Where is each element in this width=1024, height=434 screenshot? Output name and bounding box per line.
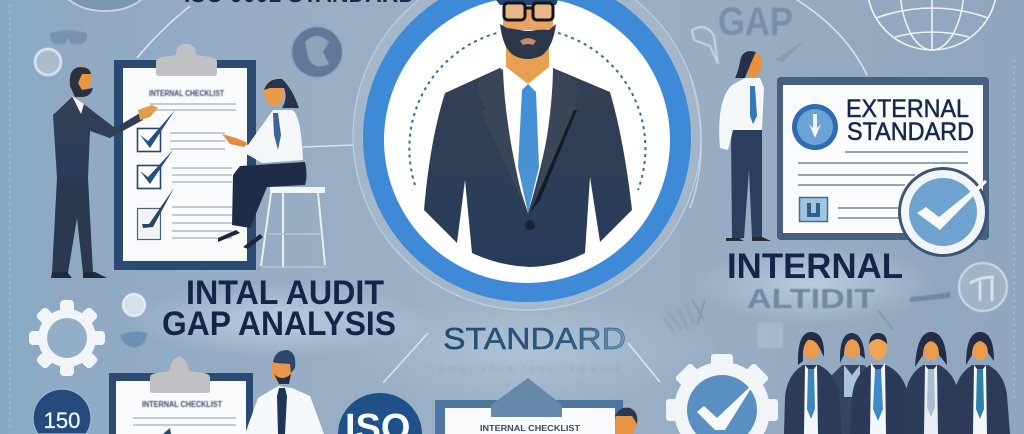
decorative icons left	[35, 27, 342, 348]
badge: ISO	[338, 393, 422, 434]
checkbox 1	[138, 110, 175, 152]
heading: initial audit gap analysis	[162, 274, 396, 343]
beard	[500, 24, 556, 59]
auditor 4	[904, 332, 963, 434]
clipboard clip	[156, 44, 217, 76]
team of five auditors	[784, 332, 1010, 434]
badge: 150	[33, 389, 91, 434]
glasses	[504, 3, 553, 20]
jacket	[424, 68, 632, 267]
figure: auditor pointing	[51, 66, 158, 278]
document lines	[798, 152, 968, 218]
shirt	[495, 66, 562, 215]
icon: white gear	[29, 300, 105, 376]
heading: internal: INTERNAL	[727, 247, 903, 286]
small document icon	[800, 198, 828, 222]
auditor 2 (back)	[828, 333, 876, 434]
small person	[615, 408, 637, 434]
figure: standing woman	[719, 51, 771, 241]
figure: seated auditor	[218, 79, 306, 249]
checklist title: INTERNAL CHECKLIST	[149, 89, 224, 98]
faint caption under standard: compliance requirements	[430, 363, 620, 375]
auditor 5	[953, 332, 1010, 434]
heading: audit, faded: ALTIDIT	[747, 283, 875, 314]
stool	[261, 187, 327, 268]
auditor 3	[850, 333, 911, 434]
clipboard title: INTERNAL CHECKLIST	[142, 400, 222, 409]
connector lines	[137, 0, 867, 383]
top-left partial medallion	[62, 0, 148, 11]
heading: standard: STANDARD	[443, 321, 626, 356]
central bottom clipboard	[435, 378, 637, 434]
badge number: 150	[44, 408, 80, 433]
hair	[496, 0, 558, 5]
faint scribbles bottom right of center	[664, 304, 694, 332]
faint scribbles top right	[692, 27, 805, 64]
check seal	[898, 167, 988, 257]
clip	[491, 378, 562, 417]
dashed ring	[409, 33, 645, 190]
checkbox 2	[138, 150, 173, 188]
clipboard title: INTERNAL CHECKLIST	[480, 424, 580, 433]
icon: down arrow badge	[792, 104, 838, 150]
clipboard: initial audit checklist	[114, 44, 256, 270]
icon: wireframe globe	[867, 0, 997, 50]
soft glow behind headings	[130, 245, 935, 405]
neck and face	[506, 40, 549, 84]
auditor 1	[784, 332, 842, 434]
checkbox 3	[138, 188, 174, 240]
lower-left clipboard	[109, 356, 253, 434]
icon: faded shield	[959, 263, 1007, 311]
central portrait	[353, 0, 701, 310]
icon: gear with check	[666, 354, 778, 434]
figure: man in white shirt	[245, 350, 324, 434]
heading: gap, faded: GAP	[718, 0, 793, 44]
title	[846, 95, 974, 146]
title line 2: STANDARD	[847, 118, 974, 146]
checklist rows	[150, 104, 236, 238]
heading line 2: GAP ANALYSIS	[162, 305, 396, 343]
title line 1: EXTERNAL	[846, 95, 969, 123]
faded small marks	[692, 292, 950, 348]
tie	[518, 84, 539, 213]
heading line 1: INTAL AUDIT	[186, 274, 384, 312]
document: external standard	[777, 77, 989, 257]
